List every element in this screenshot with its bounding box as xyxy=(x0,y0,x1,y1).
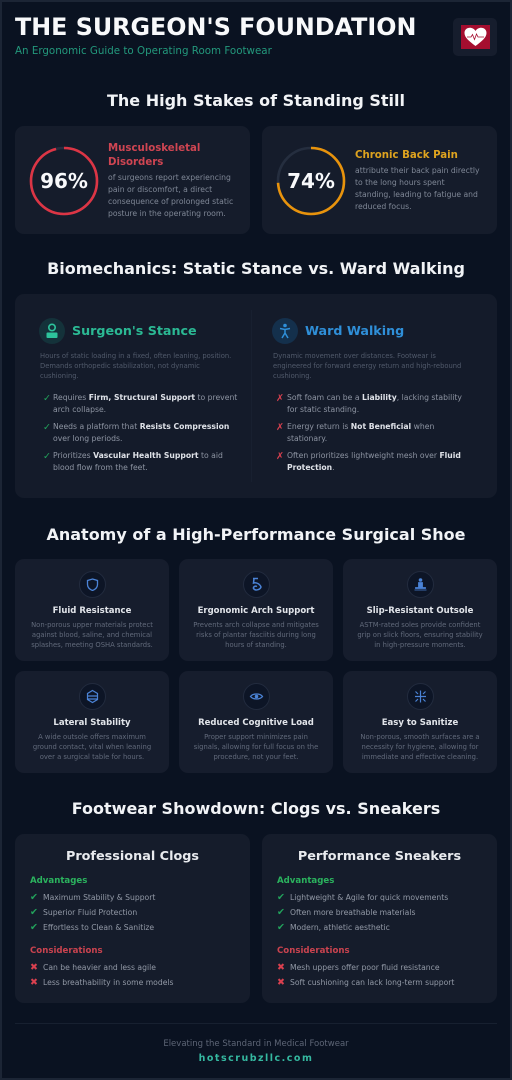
icon: eye xyxy=(243,683,270,710)
donut chart: 96% xyxy=(30,146,98,216)
advantages list: Lightweight & Agile for quick movements xyxy=(290,893,448,902)
considerations list: Less breathability in some models xyxy=(43,978,174,987)
feature text: Proper support minimizes pain xyxy=(204,733,308,741)
considerations list: ✖ xyxy=(277,977,285,988)
stance list: Prioritizes Vascular Health Support to aid xyxy=(53,451,223,460)
feature text: grip on slick floors, ensuring stability xyxy=(357,631,483,639)
advantages list: Modern, athletic aesthetic xyxy=(290,923,390,932)
walking description: Dynamic movement over distances. Footwear is xyxy=(273,352,436,360)
feature text: risks of plantar fasciitis during long xyxy=(196,631,316,639)
card: lateral stability xyxy=(15,671,169,773)
advantages list xyxy=(277,892,448,933)
panel title: Performance Sneakers xyxy=(298,849,461,864)
stance list: ✓ xyxy=(43,393,51,404)
stat text: reduced focus. xyxy=(355,202,412,211)
icon: person on floor xyxy=(407,571,434,598)
icon: hexagon xyxy=(79,683,106,710)
stat text: pain or discomfort, a direct xyxy=(108,185,212,194)
advantages list: ✔ xyxy=(30,907,38,918)
walking list: Protection. xyxy=(287,463,335,472)
subtitle: An Ergonomic Guide to Operating Room Footwear xyxy=(15,45,272,57)
stance description xyxy=(40,352,231,380)
stance description: cushioning. xyxy=(40,372,79,380)
feature text xyxy=(357,621,483,649)
walking list: ✗ xyxy=(276,422,284,433)
header xyxy=(15,13,497,57)
feature title: Lateral Stability xyxy=(53,718,131,728)
heading: showdown: Footwear Showdown: Clogs vs. Sneakers xyxy=(72,799,440,818)
panel: chronic back pain xyxy=(262,126,497,234)
feature text: A wide outsole offers maximum xyxy=(38,733,146,741)
considerations list xyxy=(30,962,174,988)
considerations list: Mesh uppers offer poor fluid resistance xyxy=(290,963,440,972)
stat heading: Musculoskeletal xyxy=(108,143,200,154)
walking list: ✗ xyxy=(276,393,284,404)
card: sanitize xyxy=(343,671,497,773)
considerations heading: Considerations xyxy=(30,946,103,956)
stat text: attribute their back pain directly xyxy=(355,166,480,175)
icon: heart logo xyxy=(453,18,497,56)
heading: anatomy: Anatomy of a High-Performance Surgical Shoe xyxy=(46,525,466,544)
card: arch support xyxy=(179,559,333,661)
advantages list: ✔ xyxy=(30,922,38,933)
heading: surgeon's stance: Surgeon's Stance xyxy=(72,323,197,338)
stat text xyxy=(108,173,233,218)
panel: professional clogs xyxy=(15,834,250,1003)
advantages list: Superior Fluid Protection xyxy=(43,908,137,917)
stance list: arch collapse. xyxy=(53,405,106,414)
advantages heading: Advantages xyxy=(30,876,87,886)
stat text: standing, leading to fatigue and xyxy=(355,190,478,199)
considerations list: ✖ xyxy=(30,962,38,973)
walking list: Often prioritizes lightweight mesh over Fluid xyxy=(287,451,461,460)
considerations list: ✖ xyxy=(277,962,285,973)
stat text: consequence of prolonged static xyxy=(108,197,233,206)
feature text: signals, allowing for full focus on the xyxy=(194,743,318,751)
feature text xyxy=(31,621,153,649)
feature text xyxy=(360,733,480,761)
advantages list: ✔ xyxy=(277,922,285,933)
considerations list: Soft cushioning can lack long-term support xyxy=(290,978,454,987)
donut chart: 74% xyxy=(276,146,346,216)
advantages heading: Advantages xyxy=(277,876,334,886)
stance description: Demands orthopedic stabilization, not dynamic xyxy=(40,362,200,370)
stance list: over long periods. xyxy=(53,434,122,443)
stance list: ✓ xyxy=(43,422,51,433)
icon: shield xyxy=(79,571,106,598)
feature text: Non-porous upper materials protect xyxy=(31,621,153,629)
walking list: for static standing. xyxy=(287,405,359,414)
panel: biomechanics xyxy=(15,294,497,498)
stat text: to the long hours spent xyxy=(355,178,445,187)
considerations list xyxy=(277,962,454,988)
considerations heading: Considerations xyxy=(277,946,350,956)
stance description: Hours of static loading in a fixed, often leaning, position. xyxy=(40,352,231,360)
icon: surgeon xyxy=(39,318,65,344)
feature text: ASTM-rated soles provide confident xyxy=(360,621,480,629)
stance list xyxy=(43,393,238,472)
stance list: Needs a platform that Resists Compression xyxy=(53,422,229,431)
considerations list: ✖ xyxy=(30,977,38,988)
feature title: Easy to Sanitize xyxy=(382,718,458,728)
panel: musculoskeletal disorders xyxy=(15,126,250,234)
card: fluid resistance xyxy=(15,559,169,661)
feature text: hours of standing. xyxy=(225,641,287,649)
icon: sparkle xyxy=(407,683,434,710)
icon: walking figure xyxy=(272,318,298,344)
panel title: Professional Clogs xyxy=(66,849,199,864)
stat text xyxy=(355,166,480,211)
feature text: necessity for hygiene, allowing for xyxy=(362,743,478,751)
walking description: engineered for forward energy return and high-rebound xyxy=(273,362,461,370)
advantages list: Often more breathable materials xyxy=(290,908,415,917)
considerations list: Can be heavier and less agile xyxy=(43,963,156,972)
heading: biomechanics: Biomechanics: Static Stance vs. Ward Walking xyxy=(47,259,465,278)
advantages list xyxy=(30,892,156,933)
heading: high stakes: The High Stakes of Standing Still xyxy=(107,91,405,110)
stat text: of surgeons report experiencing xyxy=(108,173,231,182)
walking list: stationary. xyxy=(287,434,327,443)
stat text: posture in the operating room. xyxy=(108,209,226,218)
feature title: Fluid Resistance xyxy=(53,606,131,616)
footer url: hotscrubzllc.com xyxy=(199,1053,313,1064)
feature title: Ergonomic Arch Support xyxy=(198,606,314,616)
feature title: Slip-Resistant Outsole xyxy=(367,606,473,616)
advantages list: Maximum Stability & Support xyxy=(43,893,155,902)
feature text: in high-pressure moments. xyxy=(374,641,466,649)
stance list: Requires Firm, Structural Support to prevent xyxy=(53,393,237,402)
heading: ward walking: Ward Walking xyxy=(305,323,404,338)
stance list: ✓ xyxy=(43,451,51,462)
icon: foot arch xyxy=(243,571,270,598)
title: THE SURGEON'S FOUNDATION xyxy=(15,13,416,41)
feature text: ground contact, vital when leaning xyxy=(33,743,151,751)
footer tagline: Elevating the Standard in Medical Footwear xyxy=(163,1039,349,1049)
feature text: over a surgical table for hours. xyxy=(40,753,144,761)
feature title: Reduced Cognitive Load xyxy=(198,718,314,728)
feature text: Non-porous, smooth surfaces are a xyxy=(360,733,480,741)
advantages list: ✔ xyxy=(277,892,285,903)
advantages list: ✔ xyxy=(277,907,285,918)
feature text: against blood, saline, and chemical xyxy=(32,631,152,639)
feature text: procedure, not your feet. xyxy=(213,753,299,761)
advantages list: ✔ xyxy=(30,892,38,903)
feature text xyxy=(194,733,318,761)
panel: performance sneakers xyxy=(262,834,497,1003)
feature text: Prevents arch collapse and mitigates xyxy=(193,621,319,629)
stat heading xyxy=(108,143,200,168)
donut chart: 74%: 74% xyxy=(287,169,335,193)
stat heading: Disorders xyxy=(108,157,163,168)
walking description xyxy=(273,352,461,380)
donut chart: 96%: 96% xyxy=(40,169,88,193)
card: outsole xyxy=(343,559,497,661)
feature text xyxy=(193,621,319,649)
walking list: Energy return is Not Beneficial when xyxy=(287,422,434,431)
feature text: splashes, meeting OSHA standards. xyxy=(31,641,153,649)
feature text xyxy=(33,733,151,761)
walking list: ✗ xyxy=(276,451,284,462)
card: cognitive load xyxy=(179,671,333,773)
stance list: blood flow from the feet. xyxy=(53,463,148,472)
advantages list: Effortless to Clean & Sanitize xyxy=(43,923,154,932)
feature text: immediate and effective cleaning. xyxy=(362,753,478,761)
stat heading: Chronic Back Pain xyxy=(355,150,458,161)
walking description: cushioning. xyxy=(273,372,312,380)
walking list xyxy=(276,393,462,472)
walking list: Soft foam can be a Liability, lacking stability xyxy=(287,393,462,402)
